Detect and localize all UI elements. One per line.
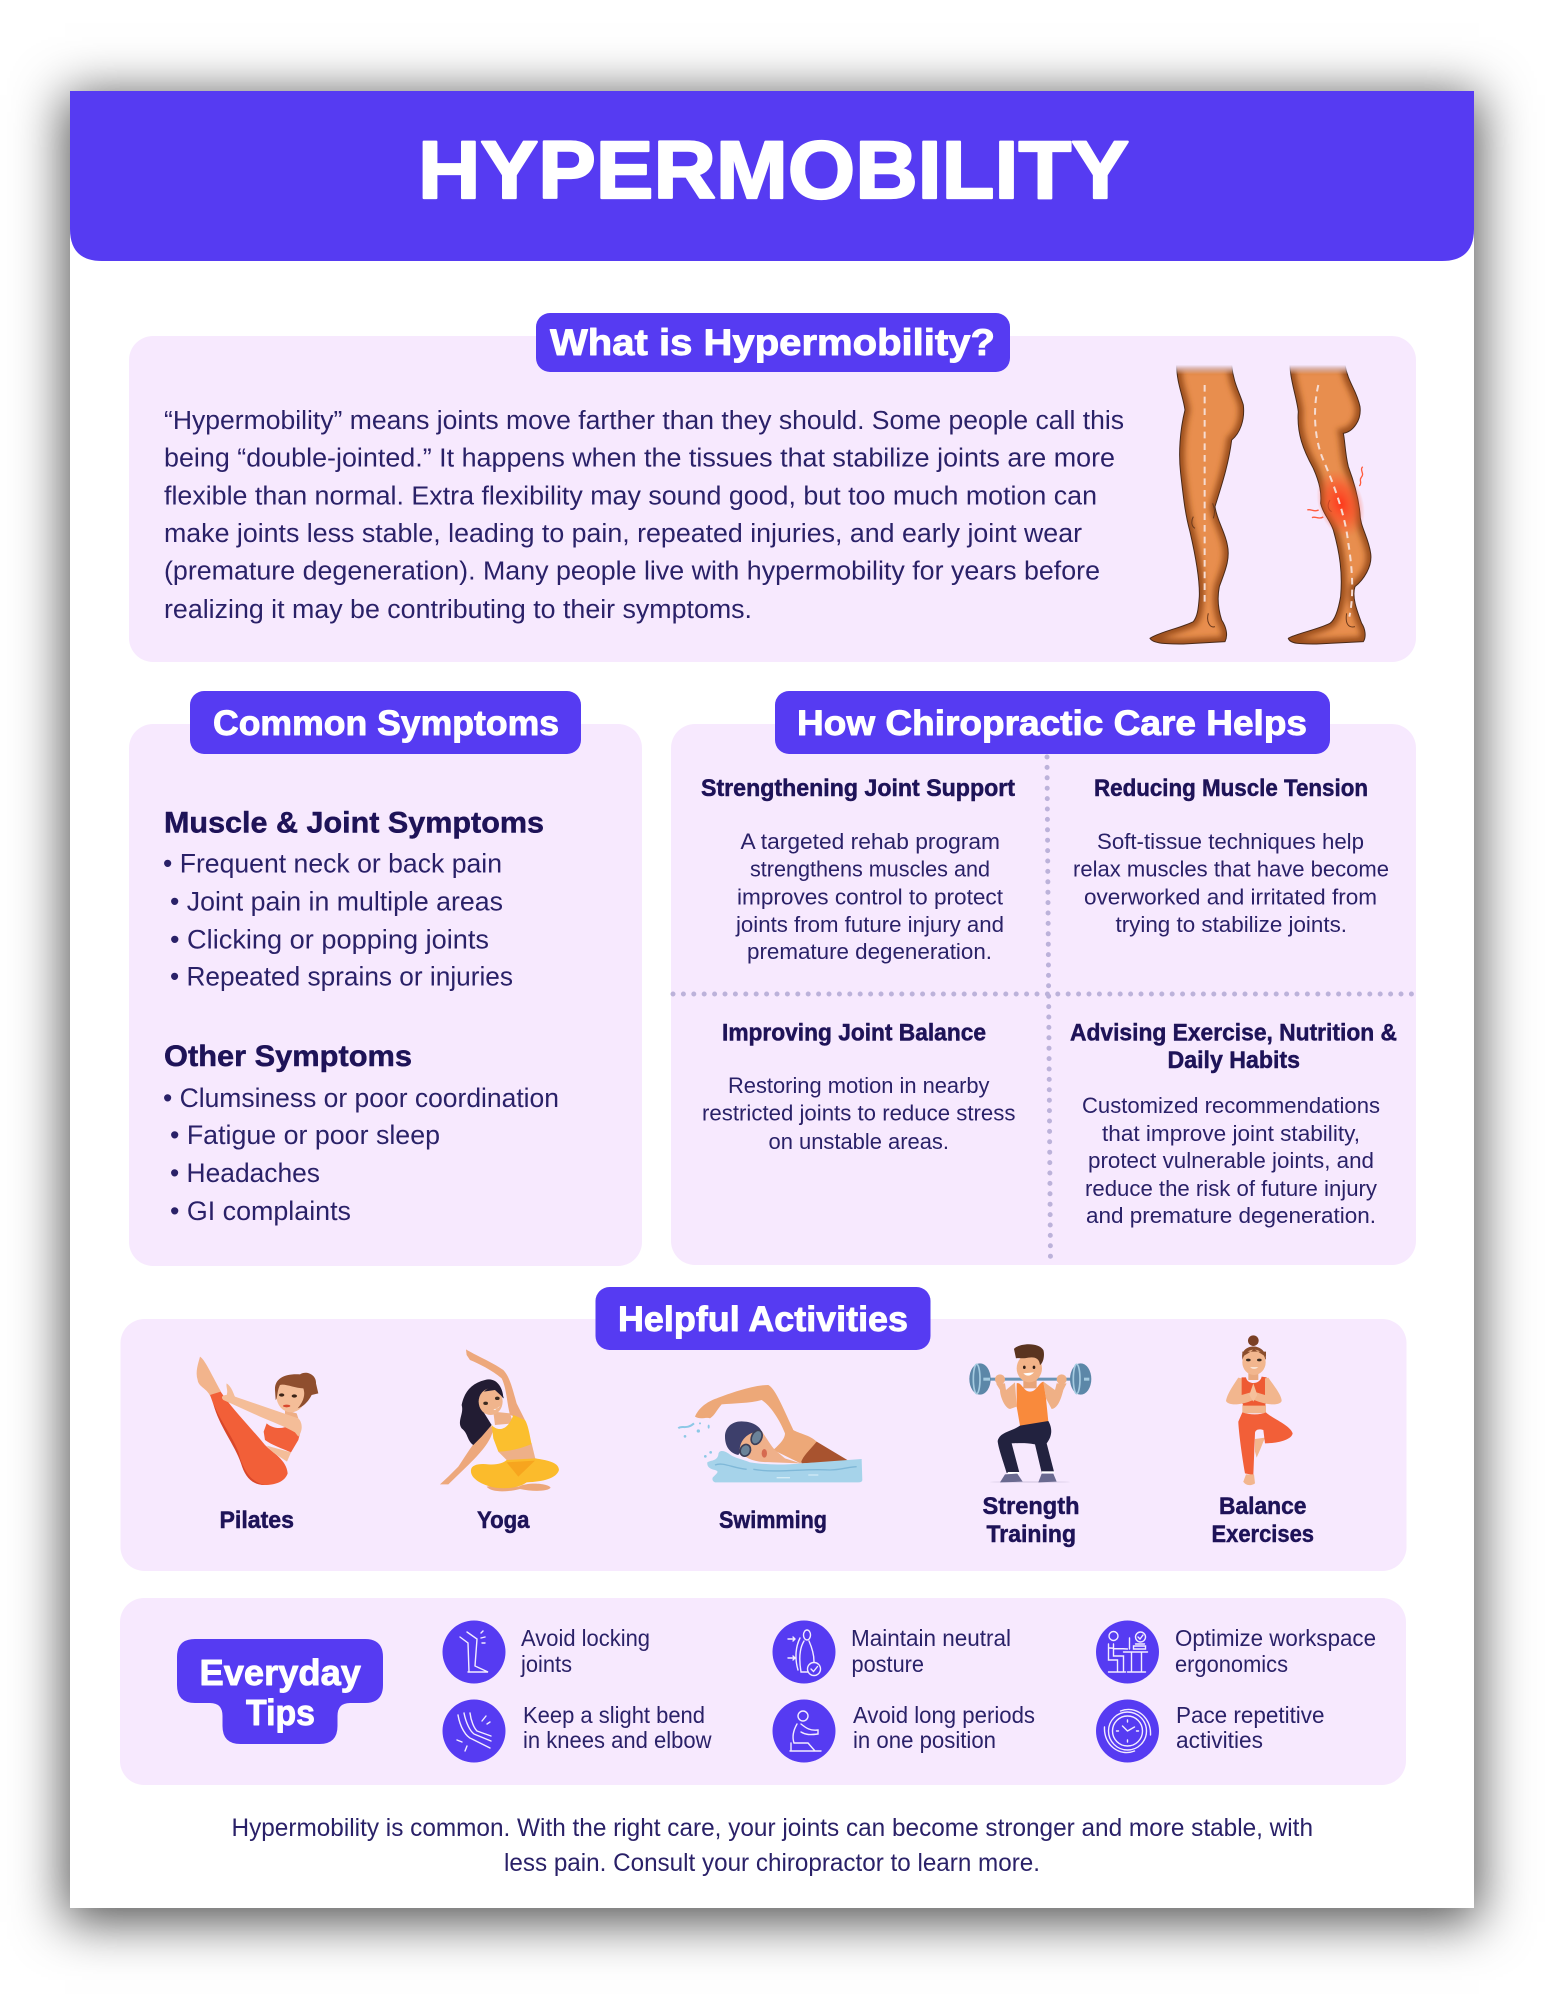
heading: common symptoms xyxy=(190,691,581,754)
block: advising exercise, nutrition and daily habits: Advising Exercise, Nutrition & xyxy=(1070,1020,1397,1046)
tip: pace repetitive activities xyxy=(1096,1700,1324,1762)
block: strengthening joint support xyxy=(701,775,1015,964)
block: advising exercise, nutrition and daily habits: Daily Habits xyxy=(1168,1047,1300,1074)
list: muscle and joint symptoms: • Joint pain in multiple areas xyxy=(170,886,503,916)
icon: neutral posture xyxy=(772,1620,836,1684)
heading: what is hypermobility: What is Hypermobility? xyxy=(550,322,995,363)
list: other symptoms: • Fatigue or poor sleep xyxy=(170,1120,440,1150)
label: strength training: Strength xyxy=(982,1493,1080,1520)
paragraph: definition: being “double-jointed.” It happens when the tissues that stabilize joints are more xyxy=(164,444,1115,472)
label: balance exercises xyxy=(1212,1493,1314,1548)
title: HYPERMOBILITY xyxy=(418,125,1129,216)
block: advising exercise, nutrition and daily habits xyxy=(1070,1020,1397,1228)
paragraph: definition xyxy=(164,407,1124,624)
icon: yoga figure xyxy=(440,1349,559,1491)
tip: keep a slight bend xyxy=(442,1700,712,1762)
footer message xyxy=(232,1814,1313,1877)
list: muscle and joint symptoms xyxy=(163,806,544,992)
tip: maintain neutral posture: Maintain neutral xyxy=(851,1625,1011,1651)
block: strengthening joint support: improves control to protect xyxy=(737,884,1004,910)
panel: common symptoms xyxy=(129,691,642,1266)
label: strength training xyxy=(982,1493,1080,1548)
icon: clock with arrows xyxy=(1096,1700,1159,1762)
block: strengthening joint support: joints from future injury and xyxy=(735,912,1004,937)
block: advising exercise, nutrition and daily habits: and premature degeneration. xyxy=(1086,1203,1376,1228)
paragraph: definition: make joints less stable, leading to pain, repeated injuries, and early joint wear xyxy=(164,520,1083,548)
block: reducing muscle tension: overworked and irritated from xyxy=(1084,884,1377,910)
list: other symptoms xyxy=(163,1040,559,1226)
heading: common symptoms: Common Symptoms xyxy=(213,704,559,743)
heading: how chiropractic care helps: How Chiropractic Care Helps xyxy=(797,704,1307,743)
heading: how chiropractic care helps xyxy=(775,691,1330,754)
tip: pace repetitive activities: Pace repetitive xyxy=(1176,1702,1324,1728)
tip: optimize workspace ergonomics: ergonomics xyxy=(1175,1651,1288,1677)
badge: everyday tips xyxy=(177,1639,383,1744)
badge: everyday tips: Everyday xyxy=(200,1652,361,1693)
icon: strength training figure xyxy=(969,1344,1091,1483)
icon: ergonomic desk xyxy=(1096,1620,1159,1684)
list: other symptoms: Other Symptoms xyxy=(164,1040,412,1073)
block: advising exercise, nutrition and daily habits: Customized recommendations xyxy=(1082,1093,1380,1118)
list: muscle and joint symptoms: • Repeated sprains or injuries xyxy=(170,962,513,992)
badge: everyday tips: Tips xyxy=(246,1692,315,1733)
icon: pilates figure xyxy=(197,1357,318,1485)
block: strengthening joint support: A targeted rehab program xyxy=(740,829,1000,854)
panel: helpful activities xyxy=(120,1287,1406,1571)
label: pilates: Pilates xyxy=(220,1507,294,1534)
block: improving joint balance xyxy=(702,1020,1016,1154)
list: muscle and joint symptoms: • Clicking or popping joints xyxy=(170,924,489,954)
heading: what is hypermobility xyxy=(536,313,1010,372)
tip: avoid long periods xyxy=(772,1700,1035,1762)
tip: maintain neutral posture: posture xyxy=(852,1651,924,1677)
icon: straight leg xyxy=(442,1620,506,1684)
block: strengthening joint support: strengthens muscles and xyxy=(750,856,990,882)
heading: helpful activities xyxy=(596,1287,930,1350)
tip: keep a slight bend: Keep a slight bend xyxy=(523,1702,705,1728)
tip: keep a slight bend: in knees and elbow xyxy=(523,1727,712,1753)
list: muscle and joint symptoms: • Frequent neck or back pain xyxy=(163,848,502,878)
tip: avoid long periods: in one position xyxy=(853,1727,996,1753)
icon: balance exercise figure xyxy=(1226,1335,1293,1485)
tip: avoid locking joints: joints xyxy=(520,1651,572,1677)
paragraph: definition: (premature degeneration). Many people live with hypermobility for years before xyxy=(164,558,1100,586)
block: strengthening joint support: Strengthening Joint Support xyxy=(701,775,1015,802)
block: strengthening joint support: premature degeneration. xyxy=(747,939,992,964)
list: other symptoms: • GI complaints xyxy=(170,1196,351,1226)
label: balance exercises: Balance xyxy=(1219,1493,1306,1520)
label: swimming: Swimming xyxy=(719,1507,827,1534)
paragraph: definition: realizing it may be contributing to their symptoms. xyxy=(164,596,752,624)
block: reducing muscle tension: relax muscles that have become xyxy=(1073,856,1389,882)
list: other symptoms: • Clumsiness or poor coordination xyxy=(163,1083,559,1113)
list: muscle and joint symptoms: Muscle & Joint Symptoms xyxy=(164,806,544,840)
block: improving joint balance: Restoring motion in nearby xyxy=(728,1073,990,1098)
header banner xyxy=(70,91,1474,261)
block: advising exercise, nutrition and daily habits: reduce the risk of future injury xyxy=(1085,1176,1378,1201)
block: reducing muscle tension: Reducing Muscle Tension xyxy=(1094,775,1368,802)
label: balance exercises: Exercises xyxy=(1212,1521,1314,1548)
block: improving joint balance: Improving Joint Balance xyxy=(722,1020,986,1046)
footer message: Hypermobility is common. With the right care, your joints can become stronger and more stable, with xyxy=(232,1814,1313,1842)
icon: seated person xyxy=(772,1700,836,1762)
tip: avoid locking joints xyxy=(442,1620,650,1684)
block: improving joint balance: on unstable areas. xyxy=(768,1129,949,1154)
tip: pace repetitive activities: activities xyxy=(1176,1727,1263,1753)
label: yoga: Yoga xyxy=(477,1507,530,1534)
block: reducing muscle tension: trying to stabilize joints. xyxy=(1116,912,1347,937)
tip: optimize workspace ergonomics xyxy=(1096,1620,1376,1684)
panel: how chiropractic care helps xyxy=(671,691,1416,1265)
icon: bent elbow xyxy=(442,1700,506,1762)
label: strength training: Training xyxy=(986,1521,1076,1548)
tip: optimize workspace ergonomics: Optimize workspace xyxy=(1175,1625,1376,1651)
illustration: healthy leg and hypermobile leg xyxy=(1150,362,1373,644)
paragraph: definition: “Hypermobility” means joints move farther than they should. Some people call this xyxy=(164,407,1124,435)
icon: swimming figure xyxy=(678,1385,862,1482)
block: advising exercise, nutrition and daily habits: protect vulnerable joints, and xyxy=(1088,1148,1374,1173)
paragraph: definition: flexible than normal. Extra flexibility may sound good, but too much motion can xyxy=(164,482,1097,510)
tip: avoid long periods: Avoid long periods xyxy=(853,1702,1035,1728)
block: advising exercise, nutrition and daily habits: that improve joint stability, xyxy=(1102,1121,1360,1146)
tip: avoid locking joints: Avoid locking xyxy=(521,1625,650,1651)
block: reducing muscle tension: Soft-tissue techniques help xyxy=(1097,829,1364,854)
panel: everyday tips xyxy=(120,1598,1406,1785)
block: reducing muscle tension xyxy=(1073,775,1389,937)
footer message: less pain. Consult your chiropractor to learn more. xyxy=(504,1849,1040,1877)
panel: what is hypermobility xyxy=(129,313,1416,662)
list: other symptoms: • Headaches xyxy=(170,1158,320,1188)
heading: helpful activities: Helpful Activities xyxy=(618,1300,908,1339)
block: improving joint balance: restricted joints to reduce stress xyxy=(702,1100,1016,1126)
tip: maintain neutral posture xyxy=(772,1620,1011,1684)
